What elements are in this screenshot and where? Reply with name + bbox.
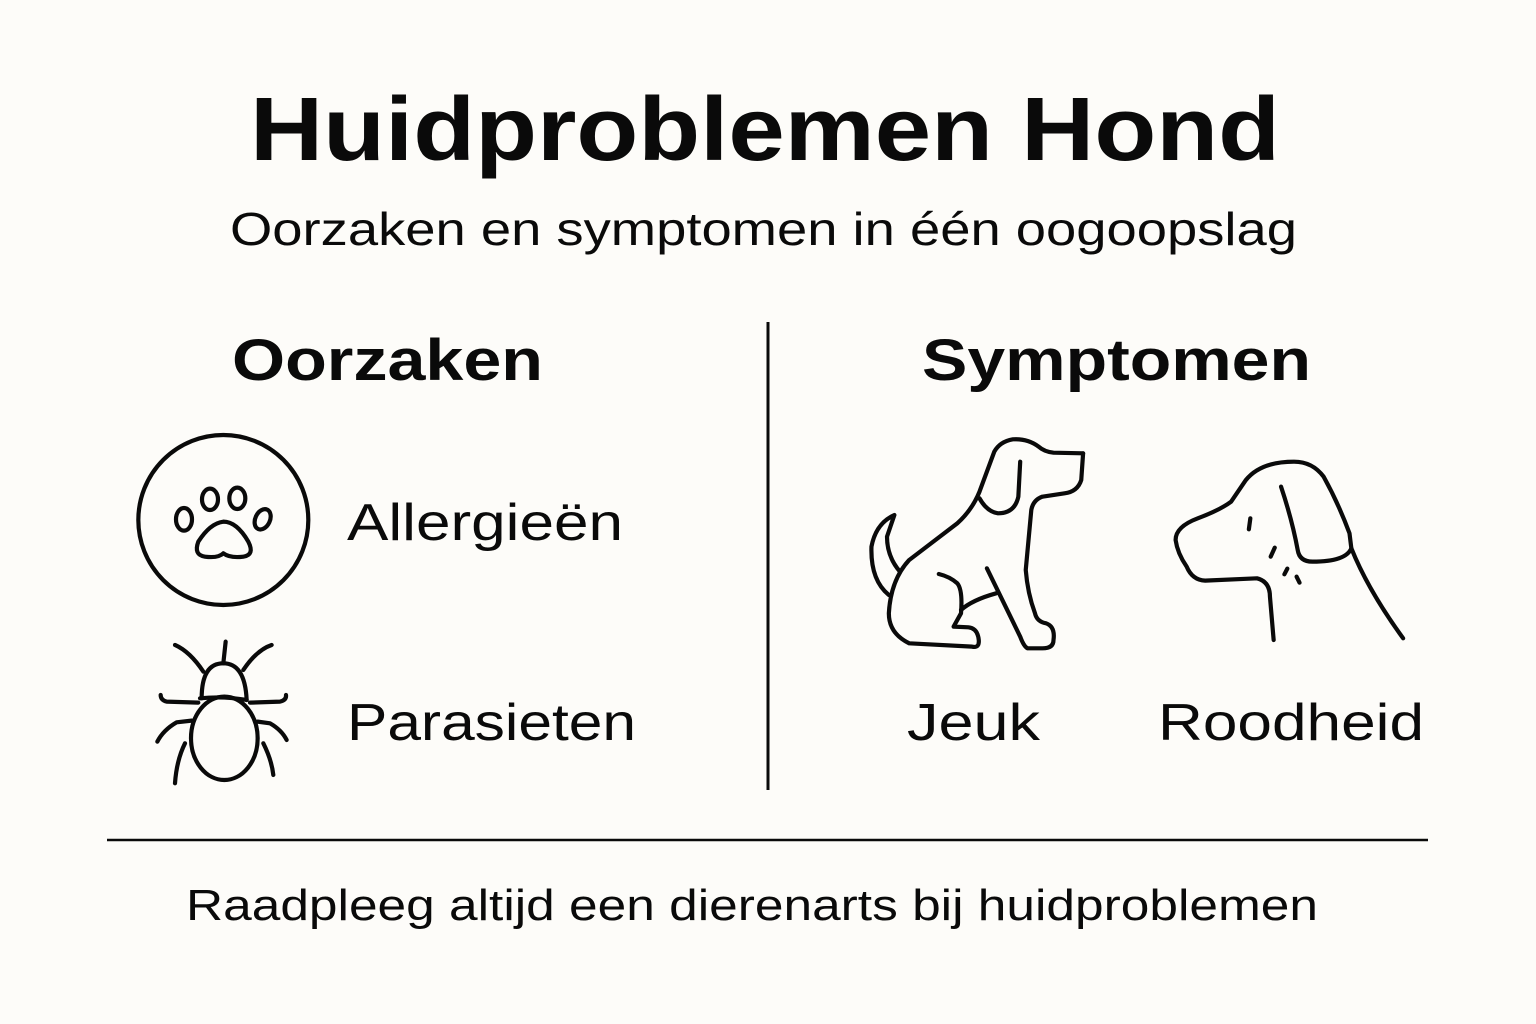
panel: oorzaken (138, 328, 636, 783)
icon: paw in circle (138, 435, 308, 605)
icon: dog head with redness (1176, 462, 1403, 640)
footer note: Raadpleeg altijd een dierenarts bij huidproblemen (186, 881, 1318, 930)
heading: symptomen: Symptomen (922, 328, 1311, 393)
subtitle: Oorzaken en symptomen in één oogoopslag (230, 203, 1297, 255)
panel: symptomen (871, 328, 1424, 752)
label: allergieën: Allergieën (347, 494, 623, 552)
label: parasieten: Parasieten (347, 694, 636, 752)
icon: sitting dog (871, 439, 1083, 648)
label: roodheid: Roodheid (1158, 694, 1424, 752)
heading: oorzaken: Oorzaken (232, 328, 543, 393)
icon: mite (157, 642, 287, 783)
label: jeuk: Jeuk (907, 694, 1041, 752)
title: Huidproblemen Hond (250, 80, 1280, 180)
